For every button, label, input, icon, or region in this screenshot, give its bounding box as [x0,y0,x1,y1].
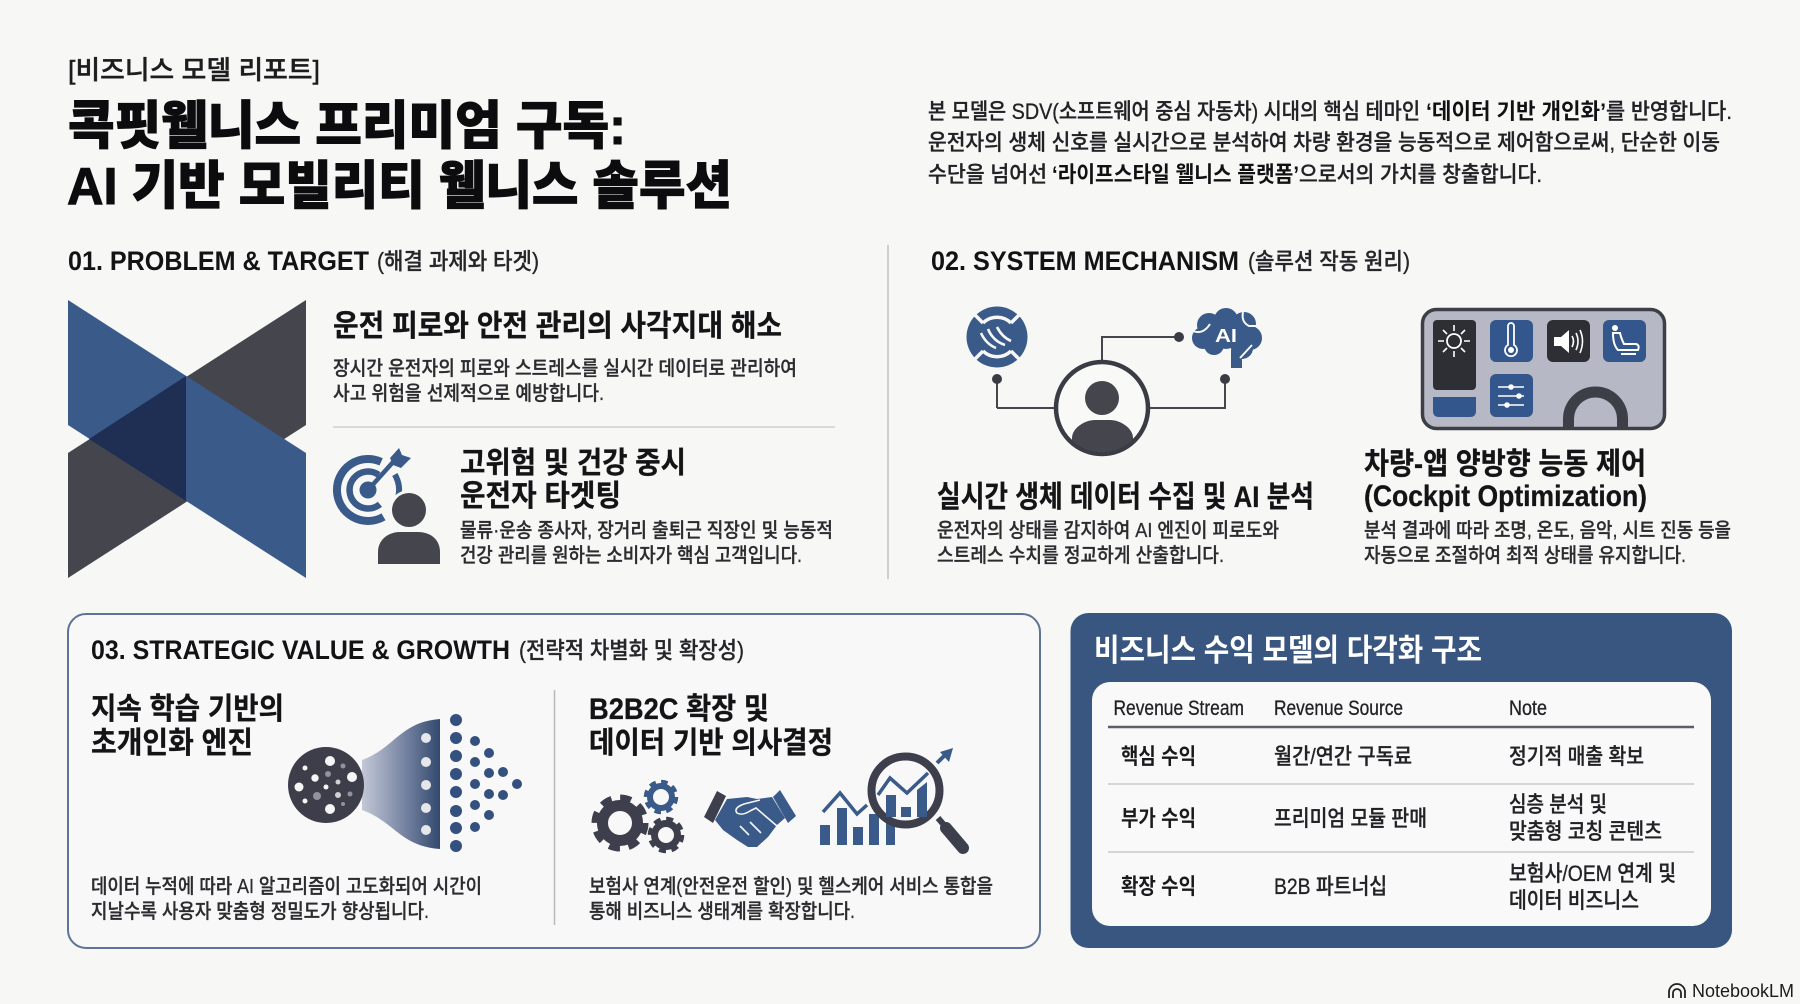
panel: problem [333,310,797,405]
table row: additional revenue [1121,792,1662,844]
text: B2B2C description: 보험사 연계(안전운전 할인) 및 헬스케어 서비스 통합을 [589,875,993,898]
panel: target: 고위험 및 건강 중시 [460,447,686,480]
intro text block: 를 반영합니다. [1606,99,1732,124]
heading: B2B2C expansion: B2B2C 확장 및 [589,693,769,726]
icon: seat tile [1603,320,1646,362]
table row: core revenue: 핵심 수익 [1121,744,1196,769]
table: revenue streams [1092,682,1711,926]
table row: core revenue [1121,744,1644,769]
text: personalization description: 지날수록 사용자 맞춤형 정밀도가 향상됩니다. [91,900,429,923]
intro text block: 본 모델은 SDV(소프트웨어 중심 자동차) 시대의 핵심 테마인 [928,99,1420,124]
table header [1114,697,1547,720]
intro text block: 운전자의 생체 신호를 실시간으로 분석하여 차량 환경을 능동적으로 제어함으로써, 단순한 이동 [928,130,1720,155]
panel: target: 물류·운송 종사자, 장거리 출퇴근 직장인 및 능동적 [460,519,833,542]
heading: hyper personalization: 지속 학습 기반의 [91,693,284,726]
icon: temperature tile [1490,320,1533,362]
heading: hyper personalization [91,693,284,760]
report tag: [비즈니스 모델 리포트] [68,55,320,85]
panel: data collection text: 실시간 생체 데이터 수집 및 AI 분석 [937,481,1314,514]
table row: expansion revenue: 데이터 비즈니스 [1509,888,1639,913]
heading: B2B2C expansion [589,693,833,760]
icon: chart and magnifier [820,748,963,848]
section heading 03 [91,635,744,665]
icon: handshake [704,790,796,847]
title: 콕핏웰니스 프리미엄 구독: [68,98,626,156]
table row: expansion revenue [1121,861,1676,913]
table row: additional revenue: 심층 분석 및 [1509,792,1607,817]
icon: data funnel [288,714,522,852]
panel: cockpit optimization text: 차량-앱 양방향 능동 제어 [1364,448,1646,481]
table header: Revenue Stream [1114,697,1244,720]
section heading 01 [68,246,539,276]
intro text block: 수단을 넘어선 [928,162,1047,187]
heading: B2B2C expansion: 데이터 기반 의사결정 [589,727,833,760]
heading: revenue model: 비즈니스 수익 모델의 다각화 구조 [1094,633,1482,668]
panel: cockpit optimization text [1364,448,1731,567]
panel: problem: 사고 위험을 선제적으로 예방합니다. [333,382,604,405]
panel: data collection text: 스트레스 수치를 정교하게 산출합니다. [937,544,1224,567]
icon: X shaped graphic [68,300,306,578]
table row: expansion revenue: 보험사/OEM 연계 및 [1509,861,1676,886]
table row: core revenue: 정기적 매출 확보 [1509,744,1644,769]
intro text block: ‘라이프스타일 웰니스 플랫폼’ [1052,162,1299,187]
section heading 01: 01. PROBLEM & TARGET [68,246,369,276]
panel: target [460,447,833,567]
icon: sliders tile [1490,374,1533,417]
table row: expansion revenue: B2B 파트너십 [1274,874,1387,899]
heading: hyper personalization: 초개인화 엔진 [91,727,253,760]
panel: target: 건강 관리를 원하는 소비자가 핵심 고객입니다. [460,544,802,567]
section heading 02: 02. SYSTEM MECHANISM [931,246,1239,276]
icon: audio tile [1547,320,1590,362]
logo: NotebookLM: NotebookLM [1692,981,1794,1001]
panel: revenue model [1070,613,1732,948]
icon: gears [595,782,682,851]
icon: cockpit dashboard [1422,310,1664,428]
panel: target: 운전자 타겟팅 [460,480,621,513]
icon: target and person [337,448,440,564]
text: B2B2C description [589,875,993,923]
icon: biometric and AI network [966,306,1262,456]
intro text block: 으로서의 가치를 창출합니다. [1299,162,1542,187]
intro text block: ‘데이터 기반 개인화’ [1426,99,1606,124]
text: personalization description [91,875,482,923]
section heading 01: (해결 과제와 타겟) [377,248,539,274]
table row: expansion revenue: 확장 수익 [1121,874,1196,899]
text: B2B2C description: 통해 비즈니스 생태계를 확장합니다. [589,900,855,923]
icon: AI brain [1192,308,1262,368]
section heading 03: (전략적 차별화 및 확장성) [519,637,744,663]
panel: problem: 운전 피로와 안전 관리의 사각지대 해소 [333,310,782,343]
icon: steering wheel [1568,392,1622,428]
text: personalization description: 데이터 누적에 따라 AI 알고리즘이 고도화되어 시간이 [91,875,482,898]
title [67,98,732,216]
icon: light tile [1433,320,1476,390]
table row: additional revenue: 맞춤형 코칭 콘텐츠 [1509,819,1662,844]
panel: cockpit optimization text: (Cockpit Optimization) [1364,480,1647,513]
intro text block [928,99,1732,187]
panel: cockpit optimization text: 자동으로 조절하여 최적 상태를 유지합니다. [1364,544,1686,567]
table row: additional revenue: 부가 수익 [1121,806,1196,831]
panel: problem: 장시간 운전자의 피로와 스트레스를 실시간 데이터로 관리하여 [333,357,797,380]
table header: Note [1509,697,1547,720]
section heading 02: (솔루션 작동 원리) [1248,248,1410,274]
section heading 03: 03. STRATEGIC VALUE & GROWTH [91,635,510,665]
panel: strategic value and growth [68,614,1040,948]
section heading 02 [931,246,1410,276]
title: AI 기반 모빌리티 웰니스 솔루션 [67,158,732,216]
panel: cockpit optimization text: 분석 결과에 따라 조명, 온도, 음악, 시트 진동 등을 [1364,519,1731,542]
table header: Revenue Source [1274,697,1403,720]
table row: core revenue: 월간/연간 구독료 [1274,744,1412,769]
panel: data collection text: 운전자의 상태를 감지하여 AI 엔진이 피로도와 [937,519,1279,542]
icon: biometric sensor [966,306,1028,368]
icon: AI brain: AI [1215,326,1237,346]
panel: data collection text [937,481,1314,567]
icon: driver in circle [1056,362,1148,456]
table row: additional revenue: 프리미엄 모듈 판매 [1274,806,1427,831]
